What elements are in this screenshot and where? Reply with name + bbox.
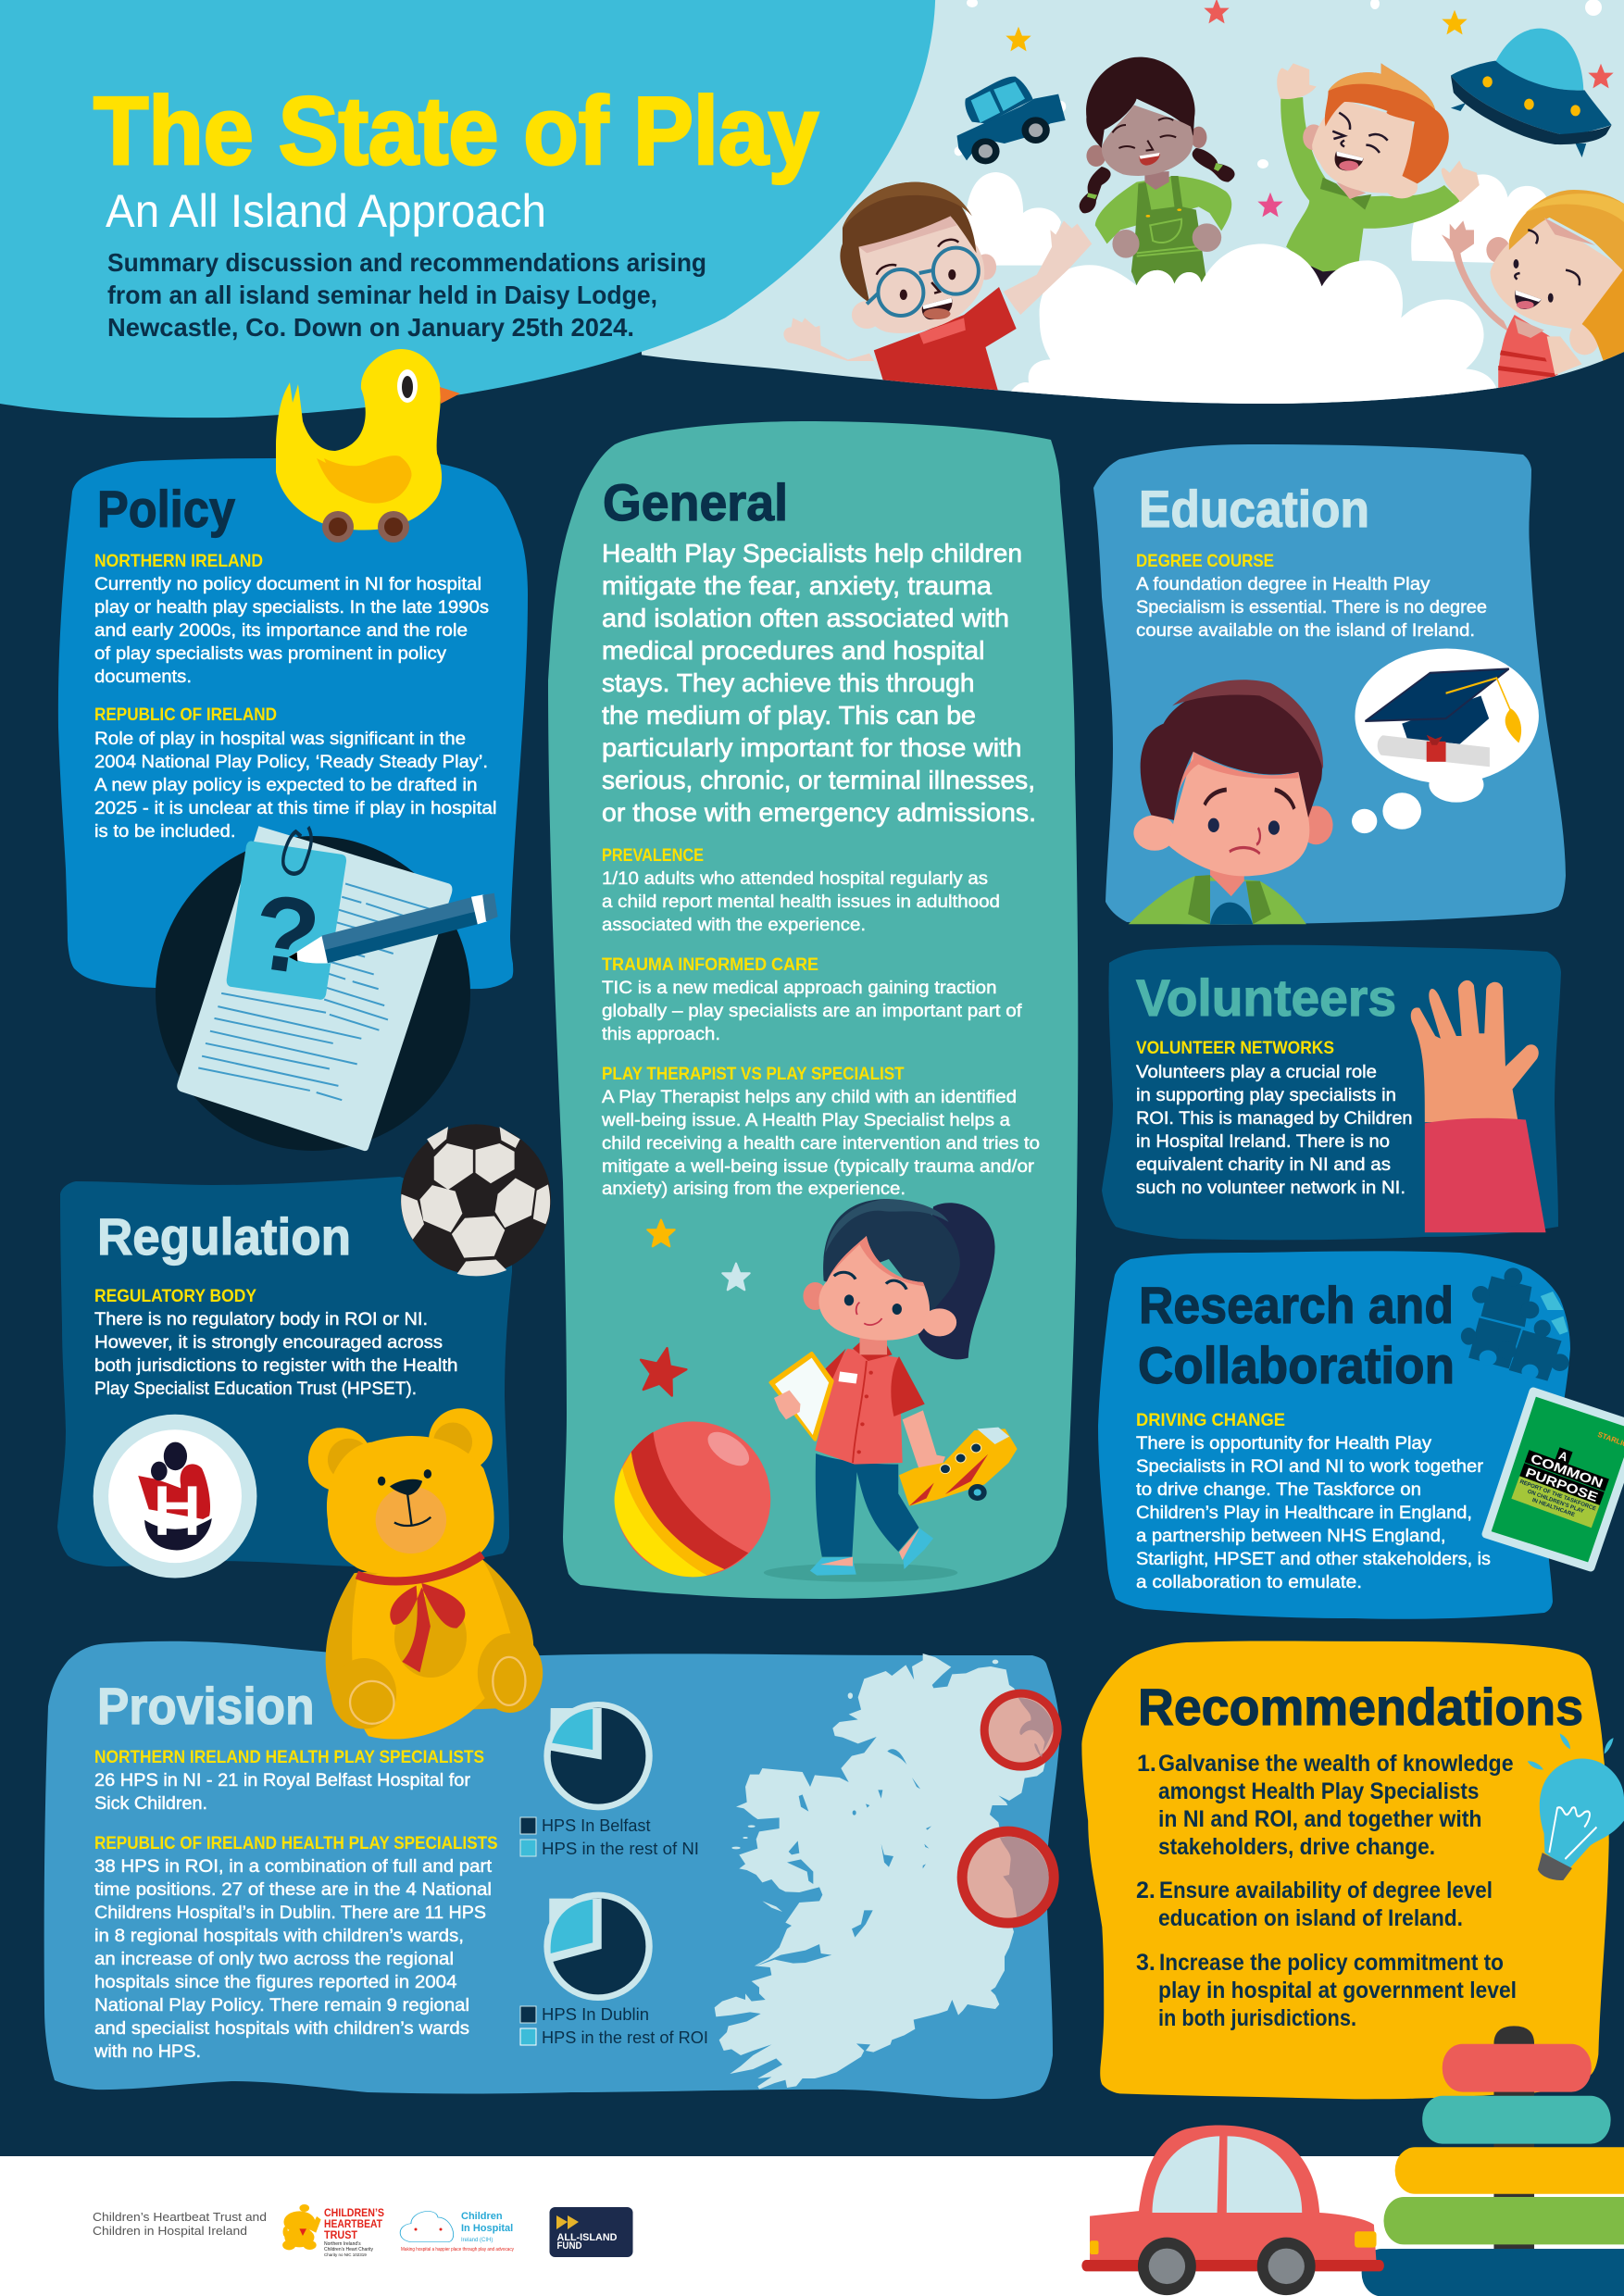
text: degree course: A foundation degree in Health Play	[1136, 575, 1430, 594]
icon: a common purpose report cover: REPORT OF THE TASKFORCE	[1518, 1479, 1596, 1512]
text: introduction: or those with emergency admissions.	[602, 798, 1036, 827]
paperclip	[283, 827, 311, 874]
text: republic of ireland health play specialists: and specialist hospitals with children’s wards	[94, 2019, 469, 2039]
header banner	[0, 0, 1624, 418]
text: introduction: medical procedures and hospital	[602, 636, 985, 665]
text: volunteer networks: VOLUNTEER NETWORKS	[1136, 1039, 1334, 1058]
text: prevalence: a child report mental health issues in adulthood	[602, 892, 1000, 912]
research background	[1098, 1251, 1570, 1619]
title: The State of Play	[94, 78, 818, 185]
text: introduction	[602, 539, 1036, 827]
icon: puzzle pieces	[1461, 1267, 1569, 1381]
text: regulatory body: REGULATORY BODY	[94, 1287, 256, 1306]
text: recommendation 2: education on island of Ireland.	[1158, 1905, 1463, 1931]
map marker: dublin	[957, 1827, 1059, 1928]
legend: dublin pie: HPS In Dublin	[542, 2005, 649, 2024]
boy with orange hair	[1277, 63, 1480, 286]
text: recommendation 1: in NI and ROI, and together with	[1158, 1806, 1481, 1832]
text: republic of ireland health play specialists: hospitals since the figures reported in 2004	[94, 1973, 457, 1992]
text: regulatory body: There is no regulatory body in ROI or NI.	[94, 1310, 428, 1329]
text: volunteer networks	[1136, 1039, 1413, 1198]
chart: dublin pie	[543, 1892, 653, 2001]
illustration: red toy car	[1081, 2125, 1384, 2295]
volunteers heading: Volunteers	[1136, 968, 1396, 1027]
logo: children's heartbeat trust: Northern Ireland’s	[324, 2241, 361, 2247]
illustration: play specialist with clipboard and toy plane	[764, 1199, 1018, 1582]
text: recommendation 1: Galvanise the wealth of knowledge	[1158, 1751, 1514, 1777]
text: northern ireland health play specialists: Sick Children.	[94, 1794, 207, 1814]
text: republic of ireland: is to be included.	[94, 822, 235, 842]
logo: children's heartbeat trust	[282, 2204, 384, 2257]
summary text: from an all island seminar held in Daisy Lodge,	[107, 281, 657, 309]
text: republic of ireland health play specialists: REPUBLIC OF IRELAND HEALTH PLAY SPECIALISTS	[94, 1834, 498, 1853]
text: recommendation 1: stakeholders, drive change.	[1158, 1834, 1435, 1860]
text: introduction: and isolation often associated with	[602, 604, 1009, 632]
icon: rubber duck toy	[276, 349, 460, 543]
text: volunteer networks: in Hospital Ireland. There is no	[1136, 1132, 1390, 1152]
back clouds	[965, 172, 1547, 266]
text: republic of ireland health play specialists: in 8 regional hospitals with children’s wards,	[94, 1927, 464, 1946]
panel: provision	[44, 1641, 1062, 2099]
text: republic of ireland health play specialists: with no HPS.	[94, 2042, 201, 2062]
icon: a common purpose report cover: IN HEALTHCARE	[1531, 1498, 1575, 1518]
text: northern ireland: NORTHERN IRELAND	[94, 552, 263, 571]
icon: a common purpose report cover: A	[1557, 1448, 1570, 1465]
map: island of ireland	[715, 1653, 1062, 2090]
text: play therapist vs play specialist: well-being issue. A Health Play Specialist helps a	[601, 1111, 1010, 1130]
text: volunteer networks: such no volunteer network in NI.	[1136, 1179, 1405, 1198]
text: driving change: Starlight, HPSET and other stakeholders, is	[1136, 1550, 1491, 1569]
text: play therapist vs play specialist: child receiving a health care intervention and tries to	[602, 1134, 1040, 1154]
text: republic of ireland: REPUBLIC OF IRELAND	[94, 705, 277, 725]
icon: document with question mark and pen	[156, 826, 498, 1151]
panel: policy	[58, 458, 528, 990]
illustration: stacking rings toy	[1362, 2026, 1624, 2296]
icon: a common purpose report cover: ON CHILDREN’S PLAY	[1527, 1489, 1584, 1515]
summary text	[107, 248, 706, 342]
icon: stars and dots	[967, 0, 1602, 217]
general heading: General	[603, 473, 788, 531]
footer credit text: Children in Hospital Ireland	[93, 2224, 247, 2238]
logo: children's heartbeat trust: TRUST	[324, 2228, 358, 2241]
text: republic of ireland	[94, 705, 496, 842]
text: recommendation 1: 1.	[1137, 1751, 1156, 1777]
illustration: striped ball	[615, 1421, 770, 1577]
legend: dublin pie	[520, 2005, 708, 2047]
policy heading: Policy	[97, 480, 235, 538]
icon: star by ufo	[1588, 64, 1614, 88]
front cloud	[1005, 243, 1499, 407]
text: northern ireland health play specialists: 26 HPS in NI - 21 in Royal Belfast Hospital for	[94, 1771, 471, 1791]
illustration: raised hand with sleeve	[1411, 980, 1546, 1232]
text: northern ireland: documents.	[94, 668, 192, 687]
text: trauma informed care: TRAUMA INFORMED CARE	[602, 955, 818, 975]
legend: belfast pie	[520, 1816, 699, 1858]
icon: a common purpose report cover: PURPOSE	[1524, 1465, 1600, 1504]
text: introduction: serious, chronic, or terminal illnesses,	[602, 766, 1035, 794]
text: driving change: a collaboration to emulate.	[1136, 1573, 1362, 1592]
text: prevalence: associated with the experience.	[602, 916, 866, 935]
logo: children's heartbeat trust: HEARTBEAT	[324, 2217, 383, 2230]
text: recommendation 2: Ensure availability of degree level	[1159, 1878, 1493, 1903]
legend: belfast pie: HPS In Belfast	[542, 1816, 650, 1835]
legend: dublin pie: HPS in the rest of ROI	[542, 2028, 708, 2047]
logo: children in hospital: Making hospital a happier place through play and advocacy	[401, 2247, 514, 2252]
icon: toy car blue	[955, 77, 1066, 164]
text: introduction: Health Play Specialists help children	[602, 539, 1022, 568]
text: republic of ireland: Role of play in hospital was significant in the	[94, 730, 466, 749]
regulation heading: Regulation	[97, 1207, 351, 1266]
text: trauma informed care: TIC is a new medical approach gaining traction	[602, 979, 996, 998]
recommendations background	[1081, 1641, 1609, 2099]
text: trauma informed care	[602, 955, 1022, 1044]
text: prevalence	[602, 846, 1000, 935]
text: degree course: course available on the island of Ireland.	[1136, 621, 1475, 641]
text: prevalence: 1/10 adults who attended hospital regularly as	[602, 869, 988, 889]
text: degree course	[1136, 552, 1487, 641]
text: driving change: to drive change. The Taskforce on	[1136, 1480, 1421, 1500]
research heading	[1138, 1276, 1455, 1394]
subtitle: An All Island Approach	[106, 185, 546, 237]
blond girl	[1442, 190, 1624, 392]
text: driving change: There is opportunity for Health Play	[1136, 1434, 1432, 1454]
text: trauma informed care: this approach.	[602, 1025, 720, 1044]
general background	[548, 421, 1078, 1599]
text: trauma informed care: globally – play specialists are an important part of	[602, 1002, 1022, 1021]
text: volunteer networks: Volunteers play a crucial role	[1136, 1063, 1377, 1082]
volunteers background	[1102, 945, 1561, 1240]
text: degree course: Specialism is essential. There is no degree	[1136, 598, 1487, 618]
logo: children in hospital: Children	[461, 2211, 503, 2222]
text: volunteer networks: ROI. This is managed by Children	[1136, 1109, 1413, 1129]
text: recommendation 3: 3.	[1136, 1950, 1156, 1976]
text: degree course: DEGREE COURSE	[1136, 552, 1274, 571]
illustration: thought bubble with graduation cap and scroll	[1352, 648, 1539, 833]
panel: research and collaboration	[1098, 1251, 1624, 1619]
policy background	[58, 458, 528, 990]
logo: children's heartbeat trust: Charity no NIC 102319	[324, 2252, 367, 2257]
text: play therapist vs play specialist: A Play Therapist helps any child with an identified	[602, 1088, 1017, 1107]
text: play therapist vs play specialist: mitigate a well-being issue (typically trauma and/or	[602, 1157, 1035, 1177]
logo: hpset	[94, 1415, 256, 1578]
text: recommendation 2: 2.	[1136, 1878, 1156, 1903]
text: regulatory body: However, it is strongly encouraged across	[94, 1333, 443, 1353]
icon: light bulb	[1528, 1733, 1624, 1880]
footer credit text: Children’s Heartbeat Trust and	[93, 2210, 267, 2224]
icon: a common purpose report cover: COMMON	[1529, 1451, 1605, 1491]
text: northern ireland health play specialists: NORTHERN IRELAND HEALTH PLAY SPECIALISTS	[94, 1748, 484, 1767]
text: volunteer networks: in supporting play specialists in	[1136, 1086, 1396, 1105]
text: regulatory body: both jurisdictions to register with the Health	[94, 1356, 457, 1376]
summary text: Newcastle, Co. Down on January 25th 2024.	[107, 313, 634, 342]
text: northern ireland: play or health play specialists. In the late 1990s	[94, 598, 489, 618]
text: northern ireland: Currently no policy document in NI for hospital	[94, 575, 481, 594]
text: republic of ireland health play specialists	[94, 1834, 498, 2062]
text: republic of ireland health play specialists: an increase of only two across the regional	[94, 1950, 454, 1969]
text: republic of ireland: 2004 National Play Policy, ‘Ready Steady Play’.	[94, 753, 488, 772]
text: play therapist vs play specialist: PLAY THERAPIST VS PLAY SPECIALIST	[602, 1065, 905, 1084]
logo: children in hospital: In Hospital	[461, 2223, 513, 2234]
text: regulatory body	[94, 1287, 457, 1399]
text: driving change: Specialists in ROI and NI to work together	[1136, 1457, 1484, 1477]
text: driving change	[1136, 1411, 1491, 1592]
lakes and shannon estuary	[755, 1749, 931, 1966]
illustration: thinking boy	[1129, 680, 1333, 924]
provision heading: Provision	[97, 1677, 315, 1735]
text: introduction: particularly important for those with	[602, 733, 1022, 762]
text: regulatory body: Play Specialist Education Trust (HPSET).	[94, 1379, 417, 1399]
text: republic of ireland: 2025 - it is unclear at this time if play in hospital	[94, 799, 496, 818]
text: republic of ireland: A new play policy is expected to be drafted in	[94, 776, 478, 795]
text: northern ireland: of play specialists was prominent in policy	[94, 644, 447, 664]
research heading: Collaboration	[1138, 1336, 1455, 1394]
text: play therapist vs play specialist: anxiety) arising from the experience.	[602, 1179, 906, 1199]
education background	[1093, 444, 1566, 925]
recommendations heading: Recommendations	[1138, 1678, 1583, 1736]
panel: regulation	[0, 1124, 1624, 2296]
panel: education	[1093, 444, 1566, 925]
panel: general	[548, 421, 1078, 1599]
text: republic of ireland health play specialists: time positions. 27 of these are in the 4 National	[94, 1880, 492, 1900]
text: driving change: Children’s Play in Healthcare in England,	[1136, 1504, 1472, 1523]
islands	[731, 1660, 998, 1912]
text: republic of ireland health play specialists: 38 HPS in ROI, in a combination of full and part	[94, 1857, 493, 1877]
logo: children in hospital	[400, 2211, 514, 2252]
text: recommendation 3: Increase the policy commitment to	[1159, 1950, 1504, 1976]
icon: football	[401, 1124, 551, 1276]
footer credit text	[93, 2210, 267, 2238]
pen	[289, 893, 498, 964]
logo: children's heartbeat trust: CHILDREN’S	[324, 2206, 384, 2219]
icon: stars	[635, 1220, 750, 1398]
document lines	[198, 883, 432, 1100]
legend: belfast pie: HPS in the rest of NI	[542, 1840, 699, 1858]
text: republic of ireland health play specialists: National Play Policy. There remain 9 regional	[94, 1996, 469, 2015]
icon: ufo	[1451, 29, 1612, 157]
education heading: Education	[1139, 480, 1369, 538]
text: play therapist vs play specialist	[601, 1065, 1040, 1199]
text: recommendation 2	[1136, 1878, 1493, 1931]
research heading: Research and	[1139, 1276, 1454, 1334]
document sheet	[177, 826, 452, 1151]
boy with glasses	[783, 182, 1092, 398]
regulation background	[57, 1177, 512, 1566]
logo: all-island fund: FUND	[557, 2240, 582, 2252]
note	[227, 841, 346, 1000]
text: republic of ireland health play specialists: Childrens Hospital’s in Dublin. There are 11 HPS	[94, 1903, 486, 1923]
logo: all-island fund: ALL-ISLAND	[557, 2232, 618, 2243]
panel: volunteers	[1102, 945, 1561, 1240]
text: recommendation 1: amongst Health Play Specialists	[1158, 1778, 1480, 1804]
text: driving change: DRIVING CHANGE	[1136, 1411, 1285, 1430]
text: introduction: the medium of play. This can be	[602, 701, 976, 730]
icon: a common purpose report cover	[1486, 1391, 1624, 1567]
text: recommendation 3: in both jurisdictions.	[1158, 2005, 1356, 2031]
dark circle	[156, 836, 470, 1151]
text: northern ireland health play specialists	[94, 1748, 484, 1814]
logo: all-island fund	[550, 2207, 633, 2257]
text: recommendation 1	[1137, 1751, 1514, 1860]
blue title shape	[0, 0, 935, 418]
text: recommendation 3: play in hospital at government level	[1158, 1978, 1517, 2003]
logo: children in hospital: Ireland (CIH)	[461, 2238, 493, 2243]
text: introduction: mitigate the fear, anxiety, trauma	[602, 571, 992, 600]
map marker: belfast	[981, 1690, 1062, 1771]
logo: children's heartbeat trust: Children’s Heart Charity	[324, 2247, 373, 2252]
text: introduction: stays. They achieve this through	[602, 668, 974, 697]
provision background	[44, 1641, 1060, 2099]
chart: belfast pie	[543, 1702, 653, 1810]
text: northern ireland: and early 2000s, its importance and the role	[94, 621, 468, 641]
light sky panel	[616, 0, 1624, 404]
text: prevalence: PREVALENCE	[602, 846, 704, 866]
footer band	[0, 2156, 1624, 2296]
summary text: Summary discussion and recommendations arising	[107, 248, 706, 277]
panel: recommendations	[1081, 1641, 1624, 2099]
text: volunteer networks: equivalent charity in NI and as	[1136, 1155, 1391, 1175]
girl with braids	[1080, 57, 1235, 285]
text: northern ireland	[94, 552, 489, 687]
illustration: children, clouds and toys	[783, 57, 1624, 407]
text: driving change: a partnership between NHS England,	[1136, 1527, 1446, 1546]
text: recommendation 3	[1136, 1950, 1517, 2031]
illustration: teddy bear	[308, 1408, 543, 1740]
question mark: ?	[245, 872, 327, 998]
